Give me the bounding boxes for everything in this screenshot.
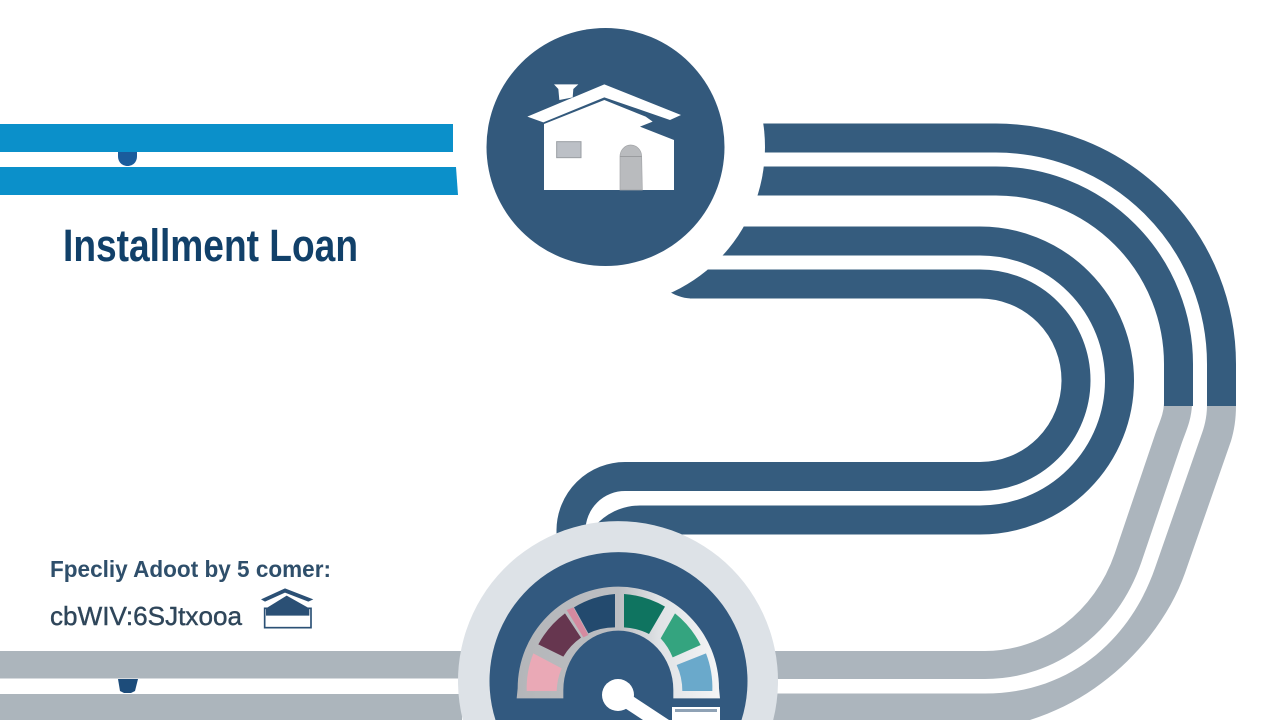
gauge segment: navy	[574, 594, 615, 633]
gray bar connector	[118, 679, 138, 693]
icon: small house envelope	[261, 588, 313, 628]
caption line: Fpecliy Adoot by 5 comer:	[50, 556, 331, 582]
gauge segment: light blue	[677, 653, 712, 691]
gauge divider: pink	[567, 607, 588, 637]
gauge needle	[602, 679, 669, 720]
title: Installment Loan	[63, 220, 358, 271]
gauge segment: dark green	[624, 594, 665, 634]
blue bars top left	[0, 124, 458, 195]
dark track 4 tip	[668, 270, 692, 298]
garbled figure line: cbWIV:6SJtxooa	[50, 601, 243, 631]
gauge segment: green	[661, 613, 701, 657]
gauge readout box	[672, 707, 720, 720]
gray track inner	[760, 404, 1178, 665]
gauge dial	[517, 587, 720, 698]
icon: house	[527, 84, 681, 190]
gauge segment: maroon	[538, 613, 581, 657]
dark track 2	[700, 181, 1178, 406]
gray bars bottom left	[0, 651, 462, 720]
dark track 1	[700, 138, 1222, 406]
dark track 4	[571, 284, 1076, 570]
gauge segment: pink	[527, 653, 562, 691]
gauge badge	[458, 521, 778, 720]
blue bar connector	[118, 152, 137, 166]
gray track outer	[760, 405, 1236, 720]
white ring around house badge	[445, 0, 765, 307]
house badge	[486, 28, 724, 266]
dark track 3	[590, 241, 1120, 575]
